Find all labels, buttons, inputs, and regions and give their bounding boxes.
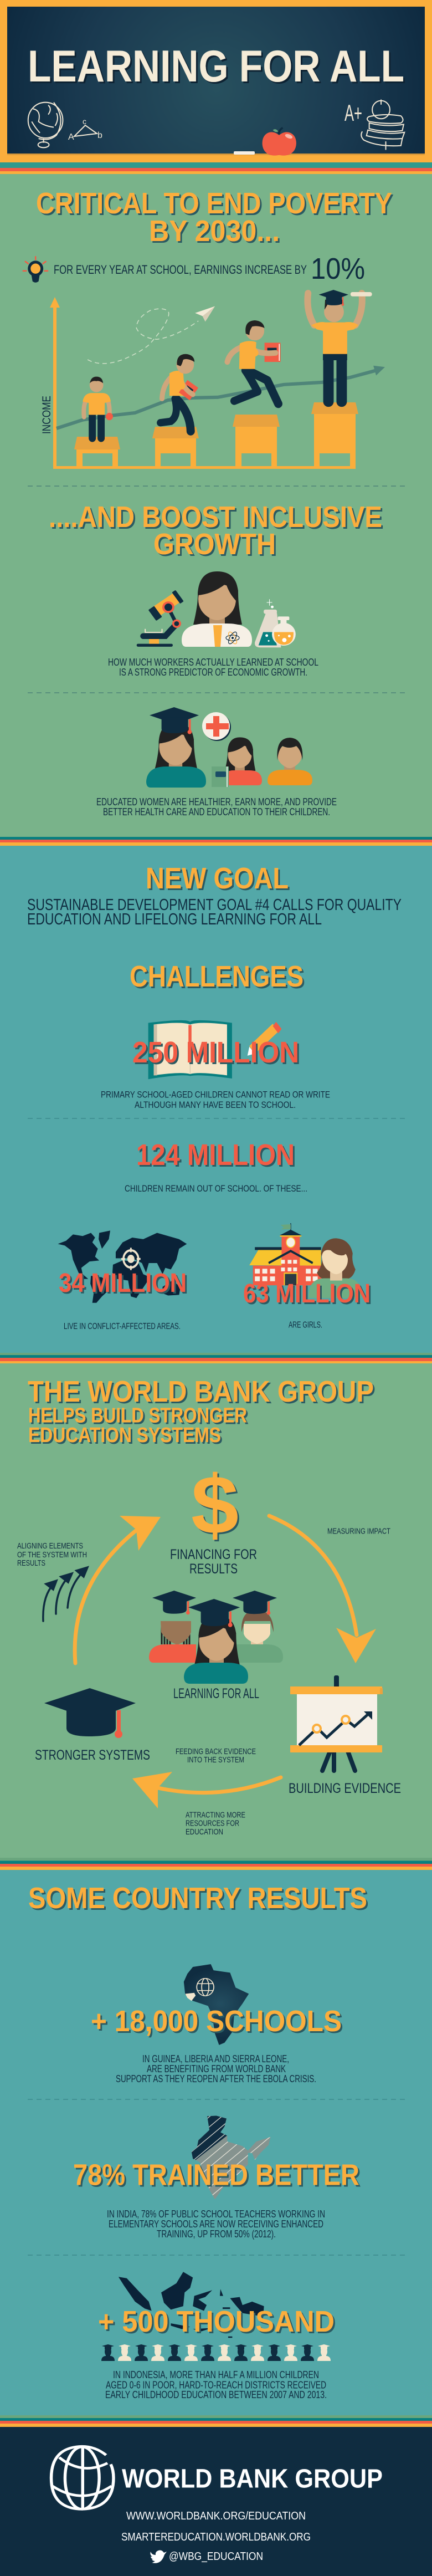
panel: critical to end poverty [0,174,432,837]
text: are girls: ARE GIRLS. [289,1321,322,1330]
label: learning for all: LEARNING FOR ALL [173,1686,259,1701]
text: cannot read or write [101,1090,330,1110]
label: aligning elements: OF THE SYSTEM WITH [17,1550,87,1560]
label: feeding back evidence: INTO THE SYSTEM [187,1755,244,1765]
text: out of school: CHILDREN REMAIN OUT OF SCHOOL. OF THESE... [125,1183,307,1194]
stripes: second section divider [0,1353,432,1363]
stripes: footer divider [0,2415,432,2427]
label: financing for results: RESULTS [189,1561,238,1577]
label: measuring impact: MEASURING IMPACT [327,1526,390,1536]
figure: graduate mother [146,707,206,788]
text: earnings increase: FOR EVERY YEAR AT SCHOOL, EARNINGS INCREASE BY [54,263,307,277]
text: educated women: EDUCATED WOMEN ARE HEALTHIER, EARN MORE, AND PROVIDE [96,796,337,807]
text: india teachers [107,2209,325,2240]
label: attracting more resources: ATTRACTING MORE [186,1810,245,1820]
figure: young child with apple [83,377,113,438]
panel: new goal and challenges [0,846,432,1353]
icon: chalk A+: A+ [344,100,362,126]
figures: three graduates [149,1591,283,1684]
figure: boy [268,738,312,785]
figure: woman scientist [182,571,252,647]
panel: chalkboard header [0,0,432,162]
heading: new goal: NEW GOAL [146,862,289,895]
icon: world map with target [58,1230,187,1303]
panel: footer [0,2427,432,2576]
text: india teachers: IN INDIA, 78% OF PUBLIC SCHOOL TEACHERS WORKING IN [107,2209,325,2220]
icon: paper plane and dashed trail [88,306,215,364]
stat: 10 percent: 10% [311,252,365,285]
icon: chalk globe [28,103,63,147]
label: feeding back evidence: FEEDING BACK EVIDENCE [176,1747,256,1756]
stat: 250 million: 250 MILLION [132,1036,299,1069]
heading: helps build stronger education systems: HELPS BUILD STRONGER [28,1404,247,1428]
handle: wbg education: @WBG_EDUCATION [169,2551,263,2563]
icon: chalk piece [234,151,255,155]
text: workers learned: HOW MUCH WORKERS ACTUALLY LEARNED AT SCHOOL [108,657,318,668]
icon: twitter bird [150,2551,167,2563]
stat: 18,000 schools: + 18,000 SCHOOLS [91,2005,342,2038]
diagram: results cycle [17,1458,401,1837]
figure: graduate right [233,1591,283,1663]
podiums [74,402,358,466]
label: financing for results: FINANCING FOR [170,1547,257,1562]
stat: 34 million: 34 MILLION [59,1269,187,1298]
stripes: header divider [0,162,432,174]
heading: the world bank group: THE WORLD BANK GROUP [28,1375,374,1408]
label: aligning elements [17,1541,87,1568]
icon: school building [249,1223,322,1285]
panel: some country results [0,1870,432,2415]
illustration: scientist with microscope and flasks [137,571,296,647]
icon: mortarboard [44,1688,136,1738]
icon: health cross [202,712,231,741]
arrow: bottom curve [132,1772,281,1808]
text: guinea liberia sierra leone: ARE BENEFITING FROM WORLD BANK [147,2063,286,2074]
label: building evidence: BUILDING EVIDENCE [289,1781,401,1796]
text: conflict areas: LIVE IN CONFLICT-AFFECTED AREAS. [64,1322,181,1331]
text: cannot read or write: PRIMARY SCHOOL-AGED CHILDREN CANNOT READ OR WRITE [101,1090,330,1100]
illustration: educated mother and children [146,707,312,788]
icon: microscope [137,590,184,647]
icon: chalk triangle: b [97,131,102,140]
text: workers learned [108,657,318,678]
heading: challenges: CHALLENGES [130,960,304,993]
text: cannot read or write: ALTHOUGH MANY HAVE BEEN TO SCHOOL. [135,1100,296,1110]
text: indonesia children: AGED 0-6 IN POOR, HARD-TO-REACH DISTRICTS RECEIVED [106,2380,326,2391]
text: sustainable development goal: EDUCATION AND LIFELONG LEARNING FOR ALL [27,911,322,928]
heading: by 2030: BY 2030... [149,214,280,248]
text: guinea liberia sierra leone [116,2053,316,2084]
icon: open book and pencil [148,1020,281,1079]
figure: graduate with diploma [307,290,372,401]
arrow: top right curve [269,1516,376,1663]
link: worldbank education: WWW.WORLDBANK.ORG/EDUCATION [126,2510,306,2522]
heading: and boost inclusive: ....AND BOOST INCLUSIVE [49,500,382,534]
icon: red apple [263,128,296,156]
label: attracting more resources: EDUCATION [186,1827,223,1837]
label: attracting more resources: RESOURCES FOR [186,1819,239,1828]
arrow: left curve [75,1516,161,1663]
panel: world bank group cycle [0,1363,432,1857]
text: sustainable development goal [27,896,402,928]
text: india teachers: ELEMENTARY SCHOOLS ARE NOW RECEIVING ENHANCED [109,2219,323,2230]
stat: 500 thousand: + 500 THOUSAND [98,2305,335,2338]
figure: child walking with book [161,354,198,431]
stat: 78 percent trained better: 78% TRAINED BETTER [73,2158,359,2191]
figure: graduate left [149,1591,196,1663]
icon: chemistry flasks [255,599,296,647]
icon: india map hatched [192,2116,270,2199]
icon: dollar sign: $ [191,1458,239,1551]
text: workers learned: IS A STRONG PREDICTOR OF ECONOMIC GROWTH. [119,667,307,678]
text: indonesia children: IN INDONESIA, MORE THAN HALF A MILLION CHILDREN [113,2369,319,2380]
heading: helps build stronger education systems [28,1404,247,1447]
label: attracting more resources [186,1810,245,1837]
stripes: third section divider [0,1858,432,1870]
icon: chalk triangle [68,117,102,142]
figure: graduate centre [184,1599,248,1684]
label: aligning elements: RESULTS [17,1558,45,1568]
text: guinea liberia sierra leone: IN GUINEA, LIBERIA AND SIERRA LEONE, [142,2053,289,2064]
icon row: fourteen graduates [101,2344,331,2361]
stat: 63 million: 63 MILLION [243,1279,371,1309]
logo text: world bank group: WORLD BANK GROUP [122,2464,383,2494]
label: income: INCOME [40,396,53,434]
icon: africa map with globe [184,1964,249,2045]
text: educated women: BETTER HEALTH CARE AND EDUCATION TO THEIR CHILDREN. [103,806,330,817]
label: feeding back evidence [176,1747,256,1765]
text: india teachers: TRAINING, UP FROM 50% (2012). [157,2229,276,2240]
heading: some country results: SOME COUNTRY RESULTS [28,1882,367,1915]
icon: world bank globe [52,2446,114,2509]
figure: teen jumping with book [227,320,280,404]
stripes: first section divider [0,837,432,846]
text: guinea liberia sierra leone: SUPPORT AS THEY REOPEN AFTER THE EBOLA CRISIS. [116,2073,316,2084]
icon: three upward arrows [43,1567,88,1621]
arrow: income axis [50,297,356,469]
icon: presentation board [290,1675,383,1771]
icon: chalk triangle: A [68,132,74,142]
figure: girl with brown hair [308,1238,361,1298]
arrow: rising trend line [56,366,385,428]
heading: helps build stronger education systems: EDUCATION SYSTEMS [28,1424,221,1447]
chart: income staircase [40,290,385,469]
label: aligning elements: ALIGNING ELEMENTS [17,1541,83,1551]
link: smarter education: SMARTEREDUCATION.WORLDBANK.ORG [121,2531,311,2543]
label: financing for results [170,1547,257,1577]
icon: chalk triangle: c [83,117,86,126]
icon: light bulb [23,257,48,283]
icon: indonesia map [119,2272,264,2338]
figure: girl with book [212,737,262,787]
stat: 124 million: 124 MILLION [136,1138,295,1172]
text: educated women [96,796,337,817]
label: stronger systems: STRONGER SYSTEMS [35,1747,150,1763]
text: indonesia children [105,2369,327,2400]
text: indonesia children: EARLY CHILDHOOD EDUCATION BETWEEN 2007 AND 2013. [105,2389,327,2400]
icon: chalk books and apple [361,100,404,150]
heading: growth: GROWTH [153,528,276,561]
